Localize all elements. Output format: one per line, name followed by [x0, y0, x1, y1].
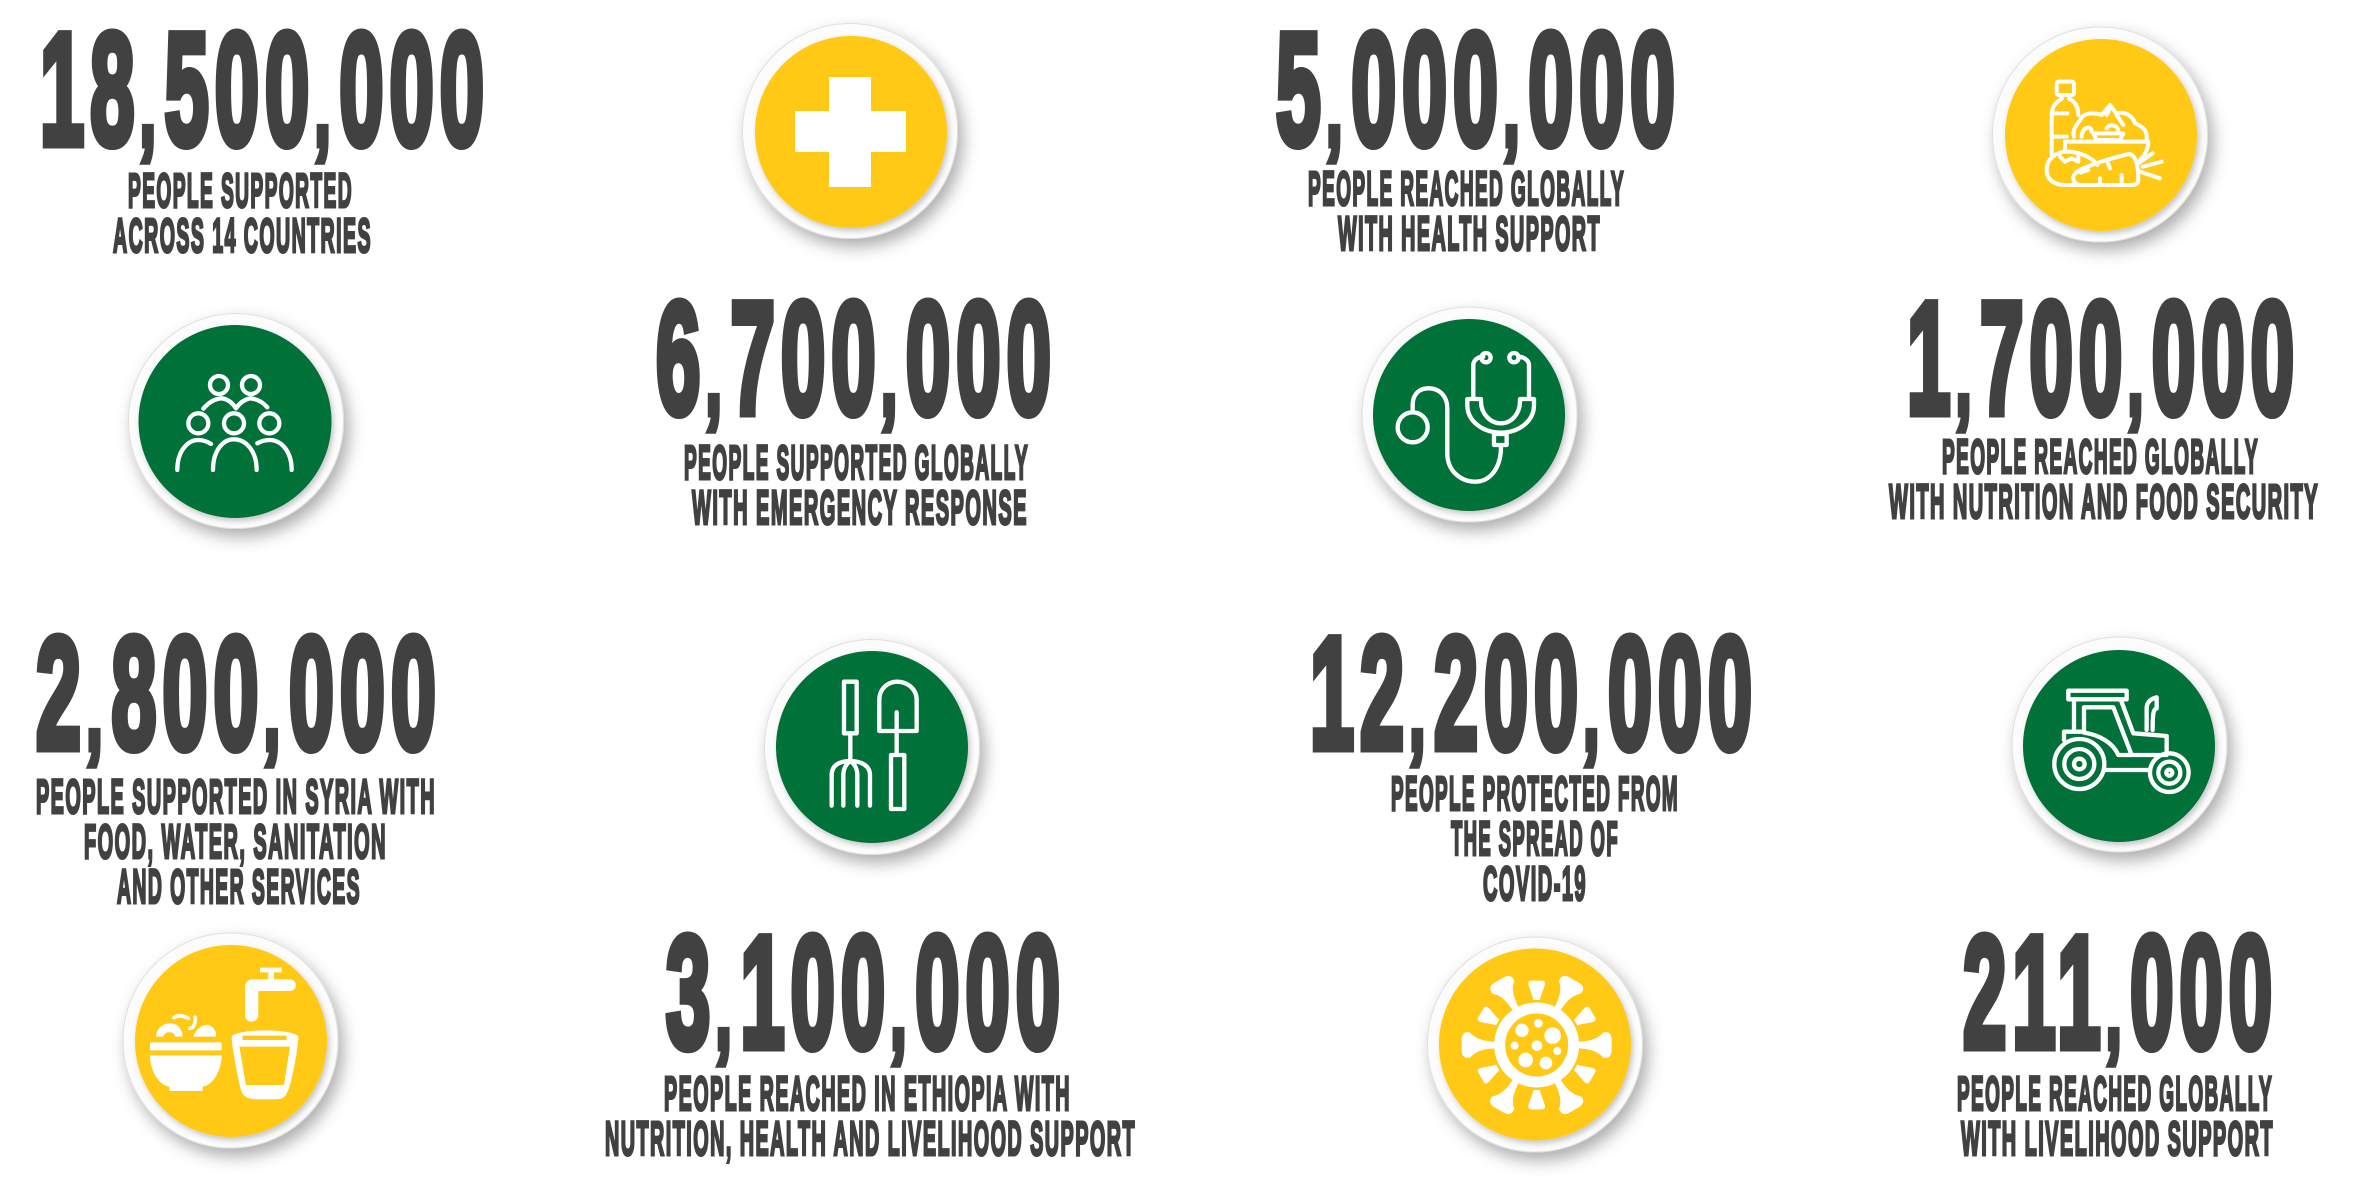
text: PEOPLE REACHED IN ETHIOPIA WITH — [664, 1068, 1071, 1121]
stat: 5,000,000 health support: WITH HEALTH SUPPORT — [1338, 208, 1601, 261]
icon: tractor badge — [2012, 637, 2227, 852]
stat: 12,200,000 COVID-19: PEOPLE PROTECTED FROM — [1391, 768, 1679, 821]
number: 3,100,000 — [666, 903, 1066, 1081]
number: 5,000,000 — [1276, 0, 1681, 178]
text: PEOPLE REACHED GLOBALLY — [1308, 163, 1625, 216]
icon: food bowl and water tap badge — [123, 933, 338, 1148]
stat: 1,700,000 nutrition and food security — [1889, 269, 2319, 529]
number: 12,200,000 — [1310, 604, 1758, 782]
icon: food basket badge — [1992, 27, 2208, 242]
icon: medical cross badge — [742, 24, 958, 238]
label: COVID-19 — [1483, 858, 1587, 911]
label: AND OTHER SERVICES — [117, 861, 361, 914]
label — [1308, 163, 1625, 261]
number: 6,700,000 — [656, 269, 1057, 447]
text: WITH EMERGENCY RESPONSE — [692, 482, 1028, 535]
text: NUTRITION, HEALTH AND LIVELIHOOD SUPPORT — [605, 1113, 1136, 1166]
label — [36, 771, 436, 914]
label — [684, 437, 1029, 535]
number: 18,500,000 — [40, 0, 490, 178]
label — [1889, 431, 2319, 529]
stat: 211,000 livelihood support — [1957, 903, 2278, 1166]
label — [605, 1068, 1136, 1166]
stat: 5,000,000 health support — [1276, 0, 1681, 261]
stat: 6,700,000 emergency response — [656, 269, 1057, 535]
label — [1957, 1068, 2274, 1166]
icon: virus badge — [1428, 937, 1642, 1152]
text: PEOPLE SUPPORTED GLOBALLY — [684, 437, 1029, 490]
label: THE SPREAD OF — [1451, 813, 1619, 866]
icon: garden tools badge — [764, 640, 980, 854]
icon: stethoscope badge — [1362, 307, 1577, 522]
stat: 12,200,000 COVID-19 — [1310, 604, 1758, 911]
text: PEOPLE SUPPORTED IN SYRIA WITH — [36, 771, 436, 824]
stat: 18,500,000 people supported: ACROSS 14 COUNTRIES — [113, 210, 372, 263]
stat: 18,500,000 people supported: PEOPLE SUPPORTED — [128, 165, 353, 218]
stat: 2,800,000 Syria — [36, 604, 442, 914]
stat: 3,100,000 Ethiopia — [605, 903, 1136, 1166]
label — [1391, 768, 1679, 911]
label — [113, 165, 372, 263]
number: 2,800,000 — [36, 604, 442, 782]
icon: people group badge — [128, 314, 344, 528]
text: FOOD, WATER, SANITATION — [84, 816, 387, 869]
stat: 18,500,000 people supported — [40, 0, 490, 263]
